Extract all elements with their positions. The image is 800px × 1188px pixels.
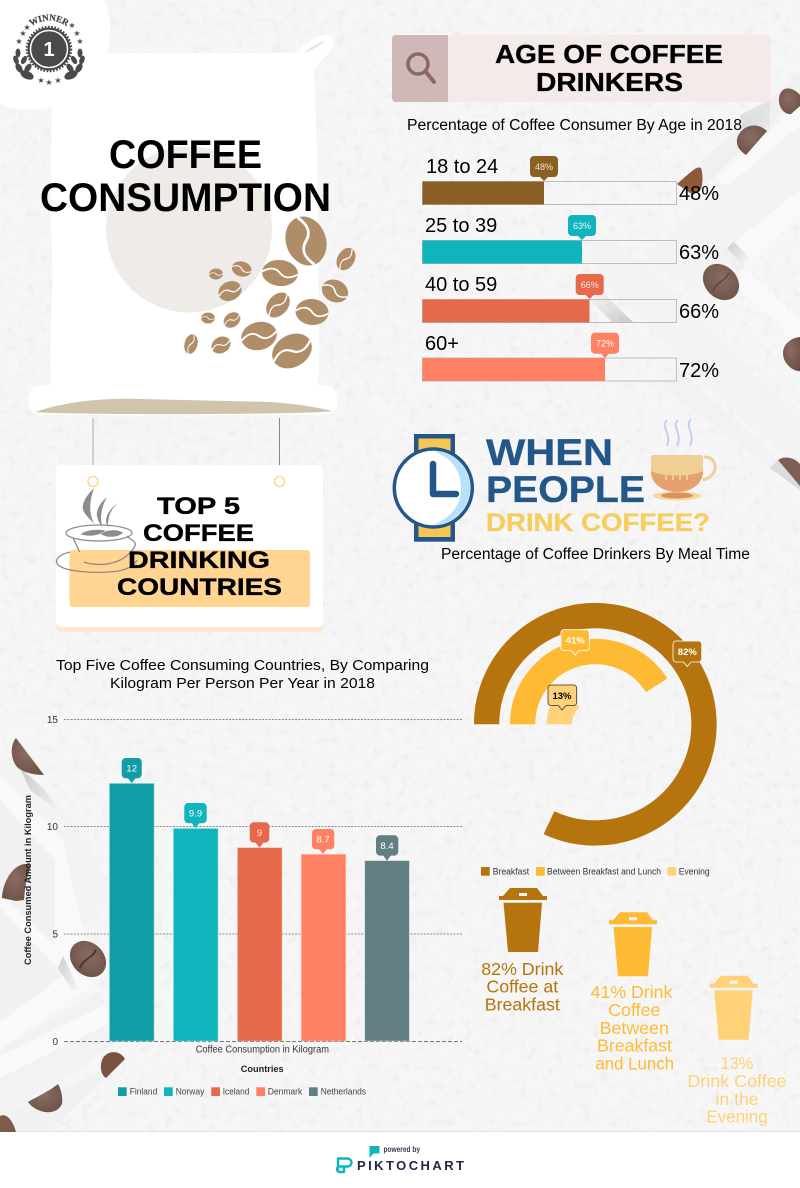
- badge: winner 1: WINNER: [28, 14, 68, 26]
- legend: meal time: Breakfast: [493, 866, 530, 876]
- legend: countries: [118, 1086, 366, 1096]
- icon: hot drink cup: [651, 419, 715, 500]
- bar: Finland: [110, 758, 154, 1041]
- hanging sign: top 5 coffee drinking countries: [56, 418, 323, 632]
- legend: meal time: [481, 866, 710, 876]
- bar: Norway: [174, 803, 218, 1041]
- y axis labels: 0: [52, 1037, 58, 1048]
- row: 40 to 59: 66%: [581, 280, 599, 290]
- chart title: top five countries: Top Five Coffee Consuming Countries, By Comparing: [56, 657, 429, 674]
- subtitle: meal time chart: Percentage of Coffee Drinkers By Meal Time: [441, 546, 750, 563]
- hanging sign: top 5 coffee drinking countries: TOP 5: [157, 493, 240, 520]
- bean: lower right: [783, 337, 800, 371]
- badge: winner 1: ★: [73, 29, 81, 38]
- chart title: top five countries: Kilogram Per Person Per Year in 2018: [110, 675, 375, 692]
- badge: winner 1: ★: [15, 37, 23, 46]
- bar: Iceland: 9: [257, 828, 262, 839]
- row: 25 to 39: [422, 215, 719, 264]
- row: 40 to 59: [422, 274, 719, 323]
- row: 18 to 24: [422, 156, 719, 205]
- icon: cup: [609, 912, 657, 976]
- x axis label: Coffee Consumption in Kilogram: [196, 1045, 329, 1056]
- legend: countries: Norway: [176, 1086, 205, 1096]
- badge: winner 1: ★: [23, 23, 31, 32]
- bar: Netherlands: 8.4: [380, 841, 394, 852]
- stat: 41% between breakfast and lunch: Between: [600, 1018, 669, 1038]
- footer: powered by piktochart: powered by: [384, 1144, 420, 1154]
- bean: left middle: [2, 864, 30, 901]
- stat: 13% in the evening: Evening: [706, 1106, 768, 1126]
- row: 60+: [422, 333, 719, 382]
- tooltip: 82%: 82%: [678, 647, 697, 658]
- heading: when people drink coffee: [394, 419, 715, 542]
- y axis labels: 10: [47, 822, 58, 833]
- legend: countries: Iceland: [223, 1086, 249, 1096]
- tooltip: 82%: [673, 641, 702, 666]
- title: CONSUMPTION: [40, 176, 331, 220]
- header: age of coffee drinkers: [392, 35, 771, 102]
- title: [40, 133, 331, 220]
- bean: left lower: [63, 934, 113, 984]
- hanging sign: top 5 coffee drinking countries: DRINKING: [128, 547, 270, 574]
- row: 25 to 39: 63%: [573, 221, 591, 231]
- bean: left top: [12, 738, 44, 775]
- bar chart: coffee consumers by age: [422, 156, 719, 382]
- row: 40 to 59: 40 to 59: [425, 274, 497, 296]
- bar chart: top five countries: [23, 715, 462, 1096]
- stat: 82% at breakfast: Coffee at: [486, 977, 558, 997]
- y axis title: Coffee Consumed Amount in Kilogram: [23, 795, 34, 965]
- icon: cup: [499, 888, 547, 952]
- decorative folded paper strips with coffee beans: right: [575, 72, 800, 490]
- x axis title: Countries: [241, 1064, 284, 1075]
- icon: cup: [710, 976, 758, 1040]
- row: 25 to 39: 25 to 39: [425, 215, 497, 237]
- bean: bottom corner: [0, 1115, 16, 1132]
- bar: Iceland: [238, 822, 282, 1041]
- badge: winner 1: [13, 14, 85, 87]
- badge: winner 1: ★: [45, 78, 53, 87]
- bean: bottom right: [778, 457, 800, 486]
- tooltip: 41%: [561, 630, 589, 655]
- stat: 13% in the evening: Drink Coffee: [687, 1071, 787, 1091]
- y axis labels: [47, 715, 58, 1048]
- icon: magnifier: [408, 54, 434, 82]
- badge: winner 1: ★: [54, 76, 62, 85]
- tooltip: 41%: 41%: [566, 636, 585, 646]
- title: COFFEE: [109, 133, 262, 177]
- header: age of coffee drinkers: AGE OF COFFEE: [495, 39, 723, 69]
- stat: 41% between breakfast and lunch: [591, 912, 674, 1074]
- header: age of coffee drinkers: DRINKERS: [536, 67, 683, 97]
- row: 25 to 39: 63%: [679, 242, 719, 264]
- legend: meal time: Between Breakfast and Lunch: [547, 866, 661, 876]
- bean: bottom middle: [101, 1052, 125, 1078]
- stat: 82% at breakfast: [481, 888, 564, 1015]
- bean: middle right: [696, 257, 746, 307]
- stat: 41% between breakfast and lunch: and Lunch: [595, 1054, 674, 1074]
- tooltip: 13%: [548, 685, 577, 710]
- bar: Denmark: 8.7: [316, 834, 330, 846]
- stat: 82% at breakfast: 82% Drink: [481, 959, 564, 979]
- row: 60+: 72%: [679, 360, 719, 382]
- y axis labels: 5: [52, 930, 58, 940]
- chart title: top five countries: [56, 657, 429, 692]
- badge: winner 1: ★: [76, 37, 84, 46]
- row: 60+: 72%: [596, 338, 614, 348]
- hanging sign: top 5 coffee drinking countries: COFFEE: [143, 520, 254, 547]
- legend: meal time: Evening: [679, 866, 710, 876]
- bar: Norway: 9.9: [189, 808, 202, 820]
- decorative folded paper strips with coffee beans: left: [0, 738, 125, 1132]
- stat: 13% in the evening: [687, 976, 787, 1126]
- row: 18 to 24: 48%: [535, 162, 553, 172]
- heading: when people drink coffee: PEOPLE: [486, 469, 645, 510]
- bar: Denmark: [301, 829, 346, 1041]
- heading: when people drink coffee: WHEN: [486, 432, 613, 473]
- icon: piktochart logo: [337, 1158, 352, 1172]
- stat: 41% between breakfast and lunch: Breakfast: [597, 1036, 672, 1056]
- icon: watch: [394, 434, 472, 542]
- legend: countries: Finland: [130, 1086, 157, 1096]
- row: 40 to 59: 66%: [679, 301, 719, 323]
- stat: 13% in the evening: 13%: [721, 1053, 753, 1073]
- stat: 41% between breakfast and lunch: 41% Drink: [591, 982, 673, 1002]
- icon: grey coffee cup: [56, 488, 137, 572]
- bean: third right: [677, 168, 702, 195]
- footer: powered by piktochart: [337, 1144, 464, 1173]
- badge: winner 1: ★: [37, 76, 45, 85]
- bean: second right: [737, 126, 767, 155]
- row: 60+: 60+: [425, 333, 459, 355]
- subtitle: age chart: Percentage of Coffee Consumer By Age in 2018: [407, 117, 742, 134]
- stat: 82% at breakfast: Breakfast: [485, 995, 560, 1015]
- y axis labels: 15: [47, 715, 58, 726]
- stat: 13% in the evening: in the: [716, 1089, 758, 1109]
- coffee sack: [0, 0, 359, 415]
- legend: countries: Denmark: [268, 1086, 303, 1096]
- coffee beans: [182, 211, 359, 375]
- icon: speech bubble: [370, 1146, 380, 1158]
- badge: winner 1: ★: [68, 21, 76, 30]
- bar: Finland: 12: [126, 764, 137, 774]
- hanging sign: top 5 coffee drinking countries: COUNTRIES: [117, 574, 282, 601]
- footer: powered by piktochart: PIKTOCHART: [357, 1158, 464, 1173]
- tooltip: 13%: 13%: [552, 691, 572, 702]
- badge: winner 1: ★: [19, 29, 27, 38]
- bean: top right: [779, 88, 800, 114]
- radial bar chart: meal time: [487, 616, 704, 833]
- badge: winner 1: 1: [43, 39, 55, 61]
- legend: countries: Netherlands: [321, 1086, 366, 1096]
- row: 18 to 24: 18 to 24: [426, 156, 498, 178]
- heading: when people drink coffee: DRINK COFFEE?: [486, 509, 710, 537]
- bean: bottom left: [28, 1084, 62, 1112]
- stat: 41% between breakfast and lunch: Coffee: [608, 1000, 660, 1020]
- bar: Netherlands: [365, 835, 409, 1041]
- row: 18 to 24: 48%: [679, 183, 719, 205]
